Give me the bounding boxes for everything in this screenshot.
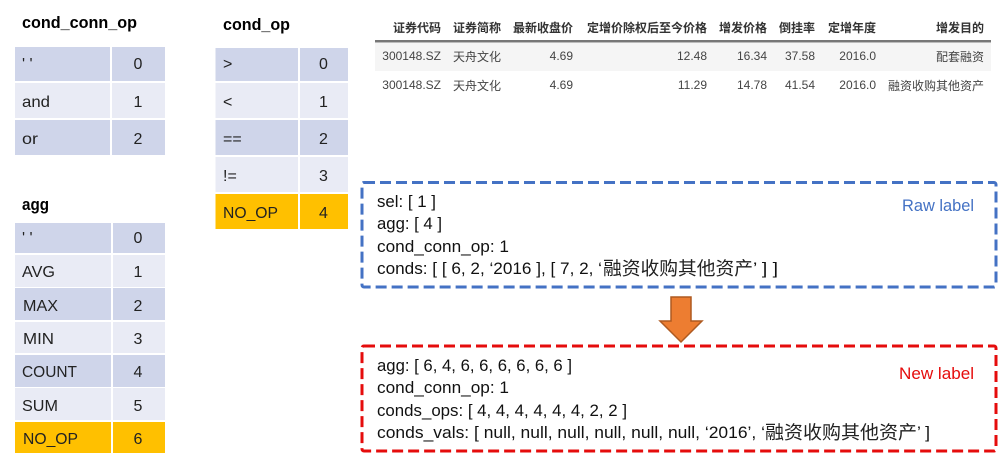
data table: stock records: 天舟文化 xyxy=(453,49,501,64)
table: agg: 4 xyxy=(134,364,143,381)
data table: stock records: 37.58 xyxy=(785,49,815,63)
data table: stock records: 12.48 xyxy=(677,49,707,63)
data table: stock records: 14.78 xyxy=(737,78,767,92)
panel: raw label: agg: [ 4 ] xyxy=(377,215,442,233)
panel: raw label: conds: [ [ 6, 2, ‘2016 ], [ 7, 2, ‘ xyxy=(377,260,602,278)
data table: stock records: 配套融资 xyxy=(936,50,984,64)
data table: stock records: 证券代码 xyxy=(393,20,441,35)
heading: cond_op: cond_op xyxy=(223,16,290,34)
panel: new label: agg: [ 6, 4, 6, 6, 6, 6, 6, 6 ] xyxy=(377,357,572,375)
table: agg: AVG xyxy=(22,264,55,281)
table: agg xyxy=(15,223,165,453)
table: agg: 1 xyxy=(134,264,143,281)
table: agg: 3 xyxy=(134,331,143,348)
table: cond_conn_op: 2 xyxy=(134,131,143,148)
panel: new label: New label xyxy=(899,365,974,383)
data table: stock records: 11.29 xyxy=(678,78,707,92)
table: cond_conn_op: 0 xyxy=(134,56,143,73)
data table: stock records: 4.69 xyxy=(550,78,573,92)
data table: stock records: 4.69 xyxy=(550,49,573,63)
table: cond_op: 2 xyxy=(319,131,328,148)
panel: raw label xyxy=(362,182,996,287)
data table: stock records: 倒挂率 xyxy=(779,20,815,35)
table: agg: 5 xyxy=(134,398,143,415)
data table: stock records: 天舟文化 xyxy=(453,78,501,93)
table: cond_op: > xyxy=(223,56,232,73)
table: cond_op: 1 xyxy=(319,94,328,111)
panel: new label xyxy=(362,346,996,451)
data table: stock records: 41.54 xyxy=(785,78,815,92)
table: cond_conn_op: or xyxy=(22,131,39,148)
table: cond_op: 4 xyxy=(319,205,328,222)
panel: raw label: sel: [ 1 ] xyxy=(377,193,436,211)
data table: stock records xyxy=(375,20,991,93)
panel: raw label: Raw label xyxy=(902,197,974,215)
panel: new label: conds_ops: [ 4, 4, 4, 4, 4, 4, 2, 2 ] xyxy=(377,402,627,420)
data table: stock records: 16.34 xyxy=(737,49,767,63)
data table: stock records: 增发价格 xyxy=(719,20,767,35)
panel: new label: conds_vals: [ null, null, null, null, null, null, ‘2016’, ‘ xyxy=(377,424,765,442)
table: cond_op: == xyxy=(223,131,242,148)
data table: stock records: 2016.0 xyxy=(839,49,876,63)
table: cond_op: != xyxy=(223,168,237,185)
table: agg: 0 xyxy=(134,230,143,247)
table: cond_conn_op xyxy=(15,47,165,155)
data table: stock records: 300148.SZ xyxy=(382,78,441,92)
data table: stock records: 最新收盘价 xyxy=(513,20,573,35)
data table: stock records: 定增年度 xyxy=(828,20,876,35)
data table: stock records: 300148.SZ xyxy=(382,49,441,63)
table: cond_op: 0 xyxy=(319,56,328,73)
table: cond_op: < xyxy=(223,94,232,111)
table: cond_op: NO_OP xyxy=(223,205,278,222)
data table: stock records: 2016.0 xyxy=(839,78,876,92)
arrow: raw to new xyxy=(660,297,702,342)
table: agg: MAX xyxy=(23,298,58,315)
table: agg: 2 xyxy=(134,298,143,315)
table: agg: MIN xyxy=(23,331,54,348)
table: cond_conn_op: ' ' xyxy=(22,56,33,73)
heading: agg: agg xyxy=(22,196,49,214)
table: agg: 6 xyxy=(134,431,143,448)
table: cond_op: 3 xyxy=(319,168,328,185)
panel: raw label: ’ ] ] xyxy=(753,260,778,278)
panel: new label: cond_conn_op: 1 xyxy=(377,379,509,397)
data table: stock records: 定增价除权后至今价格 xyxy=(587,20,707,35)
table: agg: COUNT xyxy=(22,364,77,381)
data table: stock records: 证券简称 xyxy=(453,20,501,35)
panel: raw label: cond_conn_op: 1 xyxy=(377,238,509,256)
table: agg: SUM xyxy=(22,398,58,415)
panel: new label: ’ ] xyxy=(917,424,930,442)
data table: stock records: 增发目的 xyxy=(936,20,984,35)
data table: stock records: 融资收购其他资产 xyxy=(888,78,984,93)
panel: new label: 融资收购其他资产 xyxy=(765,422,917,443)
heading: cond_conn_op: cond_conn_op xyxy=(22,14,137,32)
table: cond_conn_op: 1 xyxy=(134,94,143,111)
table: cond_op xyxy=(216,48,348,229)
table: cond_conn_op: and xyxy=(22,94,50,111)
table: agg: NO_OP xyxy=(23,431,78,448)
table: agg: ' ' xyxy=(22,230,33,247)
panel: raw label: 融资收购其他资产 xyxy=(603,258,753,279)
